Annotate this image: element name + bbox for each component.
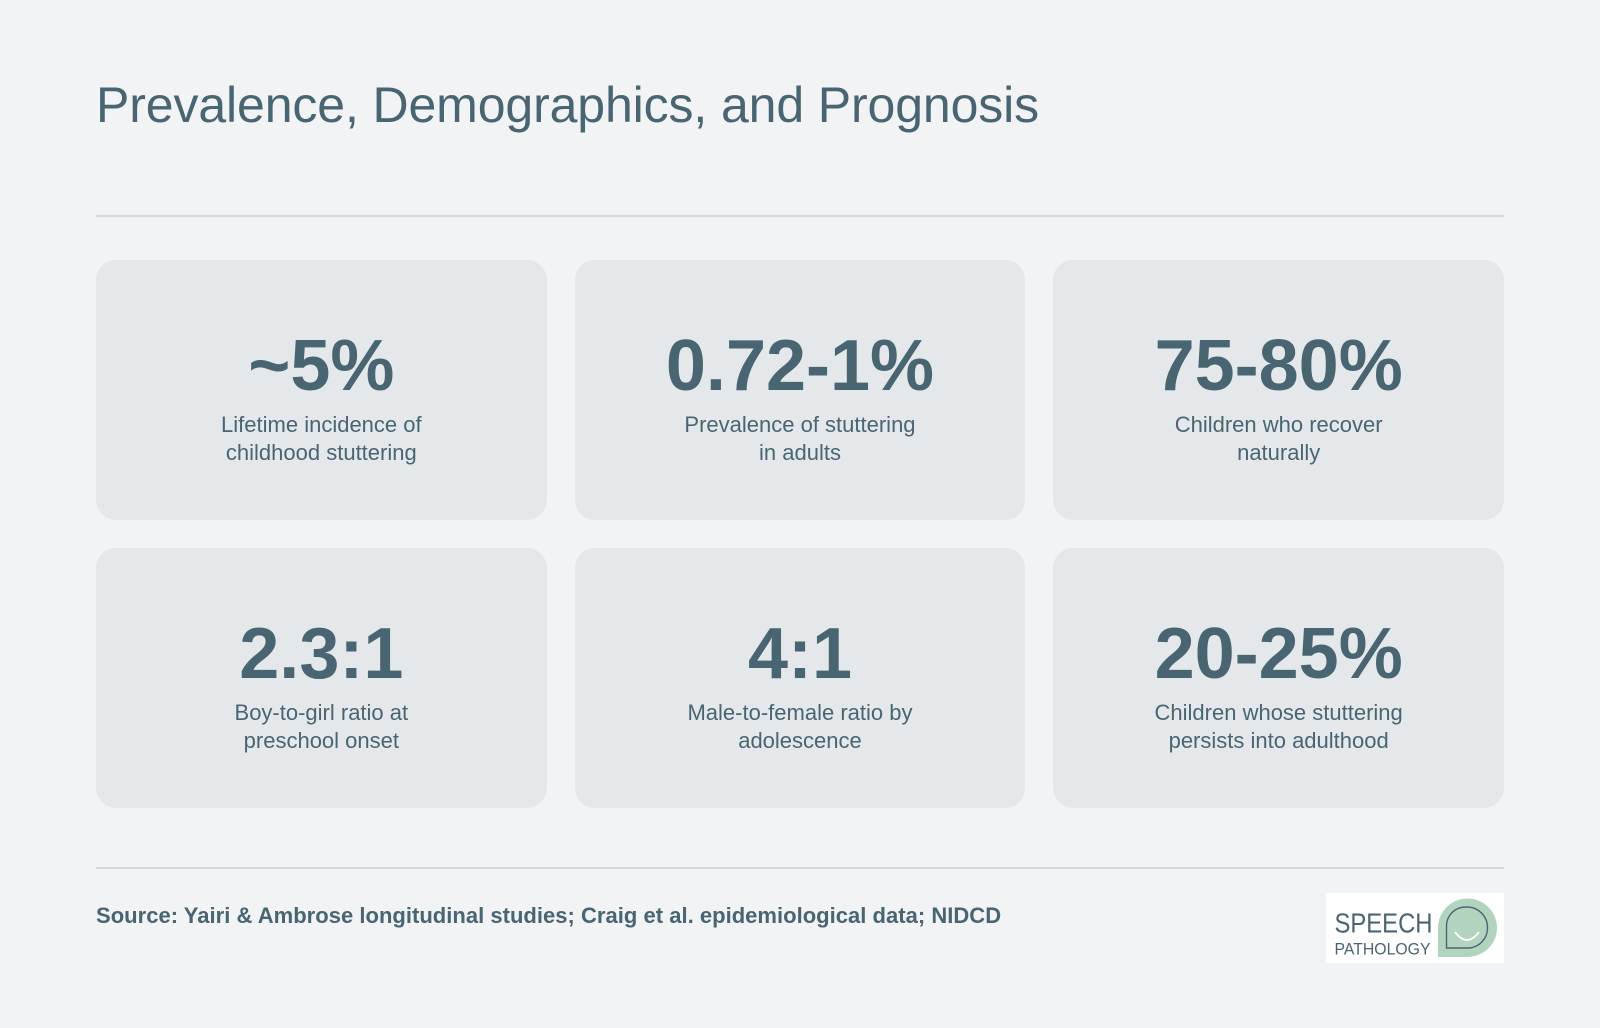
logo wordmark: PATHOLOGY <box>1334 940 1430 958</box>
source note: Source: Yairi & Ambrose longitudinal studies; Craig et al. epidemiological data; NIDCD <box>96 903 1001 928</box>
stat label: naturally <box>1237 440 1320 465</box>
stat label: childhood stuttering <box>226 440 417 465</box>
stat value: 0.72-1% <box>666 326 934 406</box>
stat label: Prevalence of stuttering <box>684 412 916 437</box>
stat label <box>687 700 912 753</box>
title: Prevalence, Demographics, and Prognosis <box>96 77 1039 133</box>
stat label: preschool onset <box>244 728 399 753</box>
stat label <box>1175 412 1383 465</box>
bottom divider <box>96 867 1504 869</box>
stat value: 4:1 <box>748 614 852 694</box>
panel: adult prevalence stat <box>575 260 1025 520</box>
icon: speech bubble with smile <box>1438 898 1497 957</box>
stat label: adolescence <box>738 728 862 753</box>
logo wordmark: SPEECH <box>1334 908 1432 938</box>
stat label: persists into adulthood <box>1169 728 1389 753</box>
panel: adolescent ratio stat <box>575 548 1025 808</box>
logo wordmark <box>1334 908 1432 958</box>
stat label: in adults <box>759 440 841 465</box>
stat label: Children who recover <box>1175 412 1383 437</box>
panel: natural recovery stat <box>1053 260 1504 520</box>
stat label <box>1155 700 1403 753</box>
stat value: 75-80% <box>1155 326 1403 406</box>
stat label: Children whose stuttering <box>1155 700 1403 725</box>
stat label: Male-to-female ratio by <box>687 700 912 725</box>
stat label: Boy-to-girl ratio at <box>235 700 408 725</box>
panel: persistence stat <box>1053 548 1504 808</box>
panel: preschool ratio stat <box>96 548 547 808</box>
panel: lifetime incidence stat <box>96 260 547 520</box>
stat value: 20-25% <box>1155 614 1403 694</box>
stat value: 2.3:1 <box>239 614 403 694</box>
stat label <box>221 412 422 465</box>
stat label: Lifetime incidence of <box>221 412 422 437</box>
stat value: ~5% <box>248 326 394 406</box>
stat label <box>684 412 916 465</box>
logo: Speech Pathology <box>1326 893 1504 963</box>
top divider <box>96 215 1504 217</box>
stat label <box>235 700 408 753</box>
